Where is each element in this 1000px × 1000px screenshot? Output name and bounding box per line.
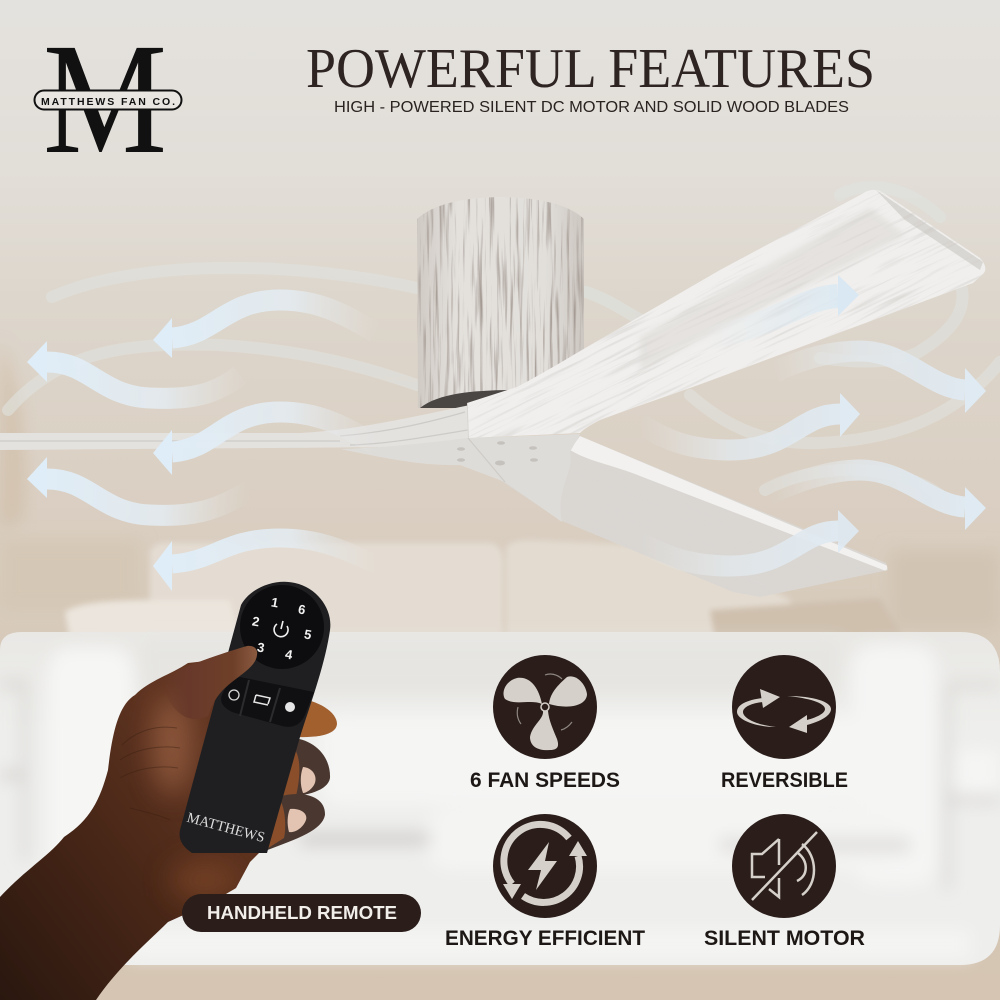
blurred white sofa seen through panel [0,640,1000,958]
power icon [274,621,288,637]
middle finger [278,738,330,796]
dial numbers [251,594,313,663]
hand holding remote [0,582,337,1000]
background sofa cushions [65,540,905,640]
label: ENERGY EFFICIENT [445,926,645,950]
subtitle: HIGH - POWERED SILENT DC MOTOR AND SOLID WOOD BLADES [334,99,849,116]
arrow: middle left 1 [153,412,375,475]
label pill: handheld remote [182,894,421,932]
arrow: right 1 [775,351,986,413]
arrow: lower right [640,510,859,566]
label: 6 FAN SPEEDS [470,768,620,792]
logo name pill: MATTHEWS FAN CO. [41,96,175,108]
upper right blade [467,190,986,438]
dial numbers: 5 [303,626,313,643]
title: POWERFUL FEATURES [306,38,875,100]
logo name pill [34,90,182,110]
index finger [290,698,337,737]
logo monogram M: M [43,11,167,187]
remote buttons [221,677,314,727]
hand highlight [152,695,192,795]
ring finger [262,794,325,852]
icon: fan [493,655,597,759]
feature: silent motor [704,814,865,950]
thumb [160,646,257,719]
left blade [0,405,472,450]
arrow: lower left [153,538,380,591]
remote dial [240,585,324,669]
label pill: handheld remote: HANDHELD REMOTE [207,902,397,923]
feature: energy efficient [445,814,645,950]
feature: reversible [721,655,848,792]
icon: energy cycle [493,814,597,918]
icon: muted speaker [732,814,836,918]
arrow: upper left 2 [27,341,240,398]
palm and arm [0,650,270,1000]
hub underside [340,434,580,522]
wood mount cylinder [415,196,587,412]
dial numbers: 6 [297,601,307,618]
arrow: right 2 [768,470,986,530]
fingers behind remote [262,698,337,852]
arrow: blade top [700,275,859,340]
dial numbers: 4 [284,646,295,663]
label: SILENT MOTOR [704,926,865,950]
feature: 6 fan speeds [470,655,620,792]
arrow: upper left 1 [153,300,375,358]
remote body [180,582,330,853]
lower right blade [502,436,888,597]
arrow: middle left 2 [27,457,250,515]
ceiling fan [0,63,1000,709]
dial numbers: 1 [270,594,280,611]
faint background air swirls [8,187,1000,495]
arrow: middle right [640,393,860,450]
label: REVERSIBLE [721,768,848,792]
remote brand: MATTHEWS [185,810,266,846]
airflow arrows [27,275,986,591]
dial numbers: 2 [251,613,261,630]
logo [34,11,182,187]
icon: rotation arrows [732,655,836,759]
translucent feature panel [0,632,1000,965]
dial numbers: 3 [256,639,266,656]
